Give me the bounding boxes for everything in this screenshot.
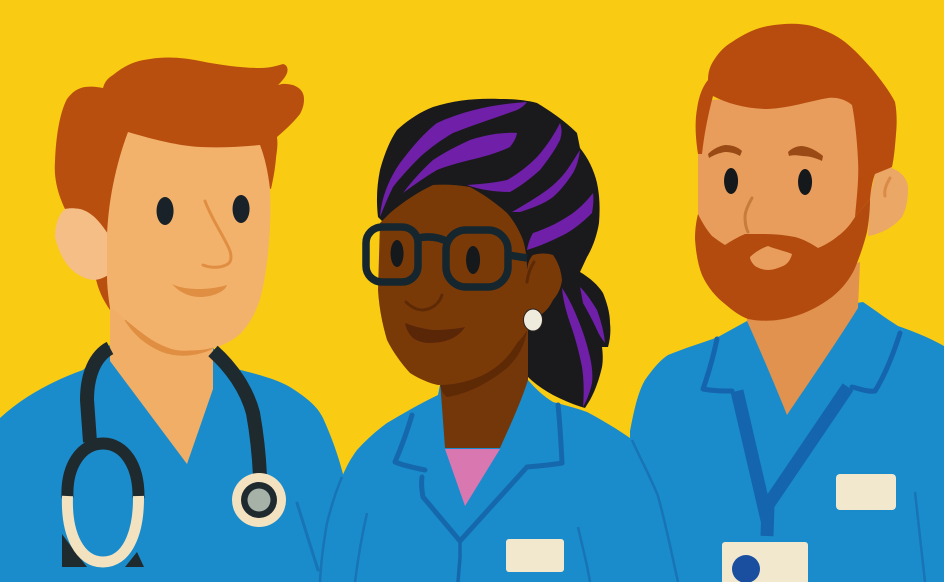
right nurse mouth [750,246,792,270]
nurse collar lines [395,405,562,541]
right nurse scrub fold [915,492,925,582]
right nurse lanyard [737,387,848,536]
stethoscope loop bottom [67,496,139,562]
nurse nose [406,295,442,310]
nurse ear [527,254,562,330]
right nurse ear fold [885,178,890,196]
figure: left doctor with stethoscope [0,58,343,582]
right nurse collar lines [703,333,900,391]
doctor scrubs [0,345,343,582]
doctor jaw line [125,320,213,355]
stripe four [512,150,580,212]
nurse neck shadow [440,330,527,397]
doctor hair under ear [95,270,110,310]
nurse mouth [405,323,465,343]
doctor scrub fold [297,503,318,570]
doctor face [107,132,270,353]
stethoscope bottom corners [62,534,144,567]
stethoscope chest piece [232,473,286,527]
nurse face [378,185,528,385]
right nurse eyes [724,168,812,195]
figure: centre nurse with glasses [320,99,680,582]
nurse name badge [506,539,564,572]
stethoscope loop top [67,444,139,498]
doctor smile [172,284,227,297]
doctor neck [110,300,213,464]
stripe five [527,193,593,250]
bun stripe two [580,287,605,343]
doctor eyes [157,195,250,225]
right nurse nose [745,198,752,232]
bun stripe one [562,288,592,407]
nurse neck [440,320,528,448]
nurse purple hair stripes [380,102,605,407]
doctor ear [55,208,108,280]
right nurse eyebrows [708,145,823,161]
right nurse neck [747,262,860,415]
right nurse id card [722,542,808,582]
nurse ear fold [527,262,534,282]
nurse tunic [320,380,680,582]
right nurse beard [695,199,870,321]
stethoscope tubing [87,348,260,476]
nurse placket [458,541,460,582]
right nurse hair [696,24,897,217]
nurse eyes [391,240,480,274]
stripe two [403,133,517,193]
right nurse tunic [630,302,944,582]
figure: right male nurse with beard [630,24,944,582]
right nurse face [698,95,862,260]
right nurse name badge [836,474,896,510]
nurse glasses [366,227,527,287]
nurse pink top [445,449,500,506]
nurse hair [377,99,610,408]
stripe three [467,123,562,192]
doctor hair [55,58,304,240]
doctor nose [203,201,231,267]
nurse earring [524,309,542,331]
stripe one [380,102,527,217]
nurse sleeve folds [320,440,678,582]
right nurse ear [868,167,908,236]
